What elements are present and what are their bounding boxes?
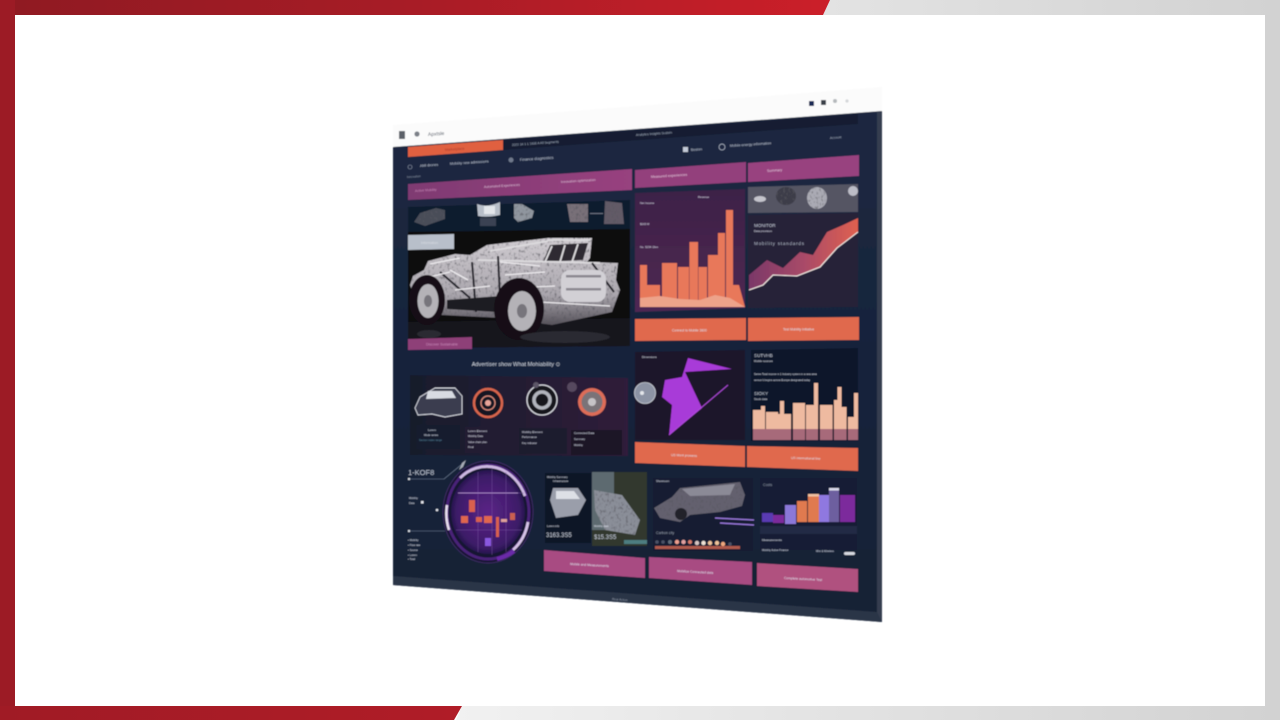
indicator dots <box>655 540 740 549</box>
app name: Apxtsle <box>428 131 445 138</box>
card: item four: Mobility <box>574 443 583 447</box>
card: item four: Summary <box>574 437 586 441</box>
button two: Mobilize Connected data <box>677 569 714 575</box>
panel: purple radar <box>634 350 745 440</box>
card: bar chart: Measurements <box>762 538 782 542</box>
top navigation: Account <box>830 135 842 140</box>
app icon <box>399 131 405 139</box>
card: item one <box>417 425 460 449</box>
card: item two: Final <box>468 445 474 449</box>
button three: Complete automotive Test <box>784 576 822 582</box>
secondary navigation: Innovation <box>407 174 421 179</box>
dark nav strip <box>503 114 858 150</box>
card: item three: Key indicator <box>522 441 537 445</box>
card: sports car: Carbon city <box>656 531 674 535</box>
monitor: bottom bezel: Rear Action <box>612 597 628 602</box>
card: item four: Connected Data <box>574 431 595 435</box>
monitor <box>393 87 882 622</box>
pink banner: overview: Active Mobility <box>415 188 437 193</box>
panel: peach bar chart <box>751 348 858 441</box>
white label chip: Information <box>421 241 438 245</box>
orange stat button: mobility: Test Mobility Initiative <box>783 328 814 332</box>
monitor: bottom bezel <box>393 576 882 622</box>
gauge legend: ▪ Lorem <box>408 553 417 557</box>
gauge side labels: Data <box>409 501 415 505</box>
card: vehicle photo: $15.3S5 <box>594 535 617 541</box>
monitor: white title bar <box>393 87 882 148</box>
button three <box>757 563 858 592</box>
card: item four <box>571 430 622 455</box>
icon: orange ring <box>474 389 502 417</box>
card: bar chart: Mobility Active Finance <box>762 548 789 552</box>
panel: vehicle hero <box>408 200 630 350</box>
card: vehicle front <box>545 473 591 543</box>
panel: peach bar chart: SUTVHB <box>754 353 773 358</box>
secondary navigation: Finance diagnostics <box>520 156 554 162</box>
panel: revenue bars <box>635 189 745 312</box>
card: item two: Lorem Element <box>468 429 487 433</box>
pink base band <box>753 429 858 440</box>
orange stat button: international: US international line <box>791 456 821 461</box>
button two <box>649 557 752 585</box>
panel: area chart: MONITOR <box>754 223 776 228</box>
icon: car wireframe <box>415 388 462 417</box>
pink banner: experience metrics: Measured experiences <box>651 173 688 179</box>
gauge dial <box>443 460 533 563</box>
top navigation: Analytics Insights Sustain <box>636 130 672 137</box>
panel: revenue bars: Net Income <box>640 201 655 205</box>
orange stat button: revenue <box>635 442 745 467</box>
card: vehicle front: 3163.3S5 <box>546 533 572 539</box>
parts thumbnail strip <box>408 200 630 234</box>
panel: area chart: Mobility standards <box>754 241 805 246</box>
icon: orange gear <box>567 382 606 416</box>
frame: red top bar <box>0 0 830 15</box>
pink banner: overview: Automated Experiences <box>484 183 520 189</box>
card: vehicle photo: Mobility data <box>594 524 609 528</box>
button one: Mobile and Measurements <box>570 562 609 568</box>
orange stat button: transport: Connect to Mobile 3600 <box>672 328 707 332</box>
panel: peach bar chart: SIOKY <box>754 391 768 396</box>
gauge legend: ▪ Source <box>408 548 418 552</box>
radar dial <box>634 382 656 404</box>
lighter area band <box>640 295 745 307</box>
panel: component icons <box>410 375 628 456</box>
pink banner: overview <box>408 169 632 200</box>
orange stat button: revenue: US Mont prowess <box>671 453 697 458</box>
settings icon <box>414 131 420 137</box>
orange active tab <box>408 140 503 157</box>
secondary navigation <box>407 141 771 179</box>
card: item one: Mode series <box>424 433 439 437</box>
car chassis illustration <box>409 238 620 343</box>
nav items: 2022 34 1 1 1000 A All Segments <box>512 140 559 147</box>
panel: peach bar chart: Series Total income in 1 Industry system in a new area <box>754 372 817 376</box>
card: vehicle front: Infrastructure <box>553 479 569 483</box>
panel: parts strip <box>748 184 858 213</box>
panel: area chart <box>748 213 858 308</box>
secondary navigation: AMI drones <box>420 163 439 168</box>
front wheel <box>494 278 544 340</box>
panel: area chart: Data provision <box>754 229 772 233</box>
card: item three: Mobility Element <box>522 430 543 434</box>
icon: gear <box>527 382 557 415</box>
orange active tab: Marketplace <box>445 147 465 152</box>
panel: vehicle cards <box>545 472 857 555</box>
panel: revenue bars: Revenue <box>698 195 710 199</box>
frame: red left bar <box>0 0 15 720</box>
rear wheel <box>409 275 445 325</box>
panel: revenue bars: No. 5234 /2km <box>640 245 659 249</box>
pink banner: experience metrics <box>635 162 746 188</box>
pink action button <box>408 337 472 350</box>
panel: purple radar: Dimensions <box>642 355 657 359</box>
pink banner: summary <box>748 155 859 182</box>
hero image background <box>408 229 630 348</box>
frame: red bottom bar <box>0 706 462 720</box>
top navigation <box>408 114 858 157</box>
card: bar chart <box>760 478 857 555</box>
secondary navigation: Boston <box>691 147 702 152</box>
panel: peach bar chart: sensor It begins across Europe designated today <box>754 378 811 382</box>
card: item one: Section index range <box>419 438 442 442</box>
card: item two: Mobility Data <box>468 434 484 438</box>
gauge legend: ▪ Total <box>408 557 415 561</box>
pink banner: overview: Innovation optimization <box>561 178 596 184</box>
card: item three <box>519 428 567 454</box>
pink banner: summary: Summary <box>767 168 783 173</box>
panel: circular gauge <box>408 460 533 563</box>
frame: grey right border <box>456 0 1280 720</box>
radar shape <box>662 358 732 435</box>
pink action button: Discover Sustainable <box>426 342 458 346</box>
button one <box>544 550 645 578</box>
panel: peach bar chart: Stock data <box>754 397 768 401</box>
gauge legend: ▪ Mobility <box>408 538 419 542</box>
card: vehicle front: Lorem info <box>547 524 560 528</box>
floor reflection <box>520 331 610 343</box>
card: item one: Lorem <box>428 428 437 432</box>
secondary navigation: Mobile energy information <box>730 141 771 148</box>
card: item three: Performance <box>522 435 537 439</box>
monitor: right bezel <box>877 111 882 622</box>
panel: revenue bars: $163 M <box>640 222 650 226</box>
card: vehicle front: Mobility Summary <box>547 475 568 479</box>
card: bar chart: Costs <box>763 483 772 487</box>
orange stat button: international <box>747 446 858 471</box>
gauge side labels: Mobility <box>409 496 418 500</box>
monitor: screen <box>393 111 882 622</box>
area series <box>749 218 858 290</box>
card: sports car: Showroom <box>656 479 670 483</box>
card: item two <box>465 427 513 453</box>
card: sports car <box>653 478 754 551</box>
orange bars <box>640 210 745 307</box>
gauge side labels <box>409 496 438 511</box>
orange stat button: mobility <box>748 317 859 341</box>
card: bar chart: Mini & Wireless <box>816 549 835 553</box>
gauge legend: ▪ Flow rate <box>408 543 421 547</box>
card: vehicle photo <box>592 472 647 546</box>
gauge metric: 1-KOF8 <box>408 468 434 477</box>
pink action buttons <box>544 550 858 592</box>
white label chip <box>408 234 454 250</box>
cabin frame <box>543 243 588 262</box>
heading: section title: Advertiser show What Mohiability ⊙ <box>472 362 561 368</box>
peach bars <box>753 383 858 440</box>
orange stat button: transport <box>635 318 746 341</box>
secondary navigation: Mobility new admissions <box>450 159 489 166</box>
gauge legend <box>408 538 421 561</box>
card: item two: Value chain plan <box>468 440 488 444</box>
panel: peach bar chart: Mobile sources <box>754 359 773 363</box>
window controls <box>809 99 849 106</box>
